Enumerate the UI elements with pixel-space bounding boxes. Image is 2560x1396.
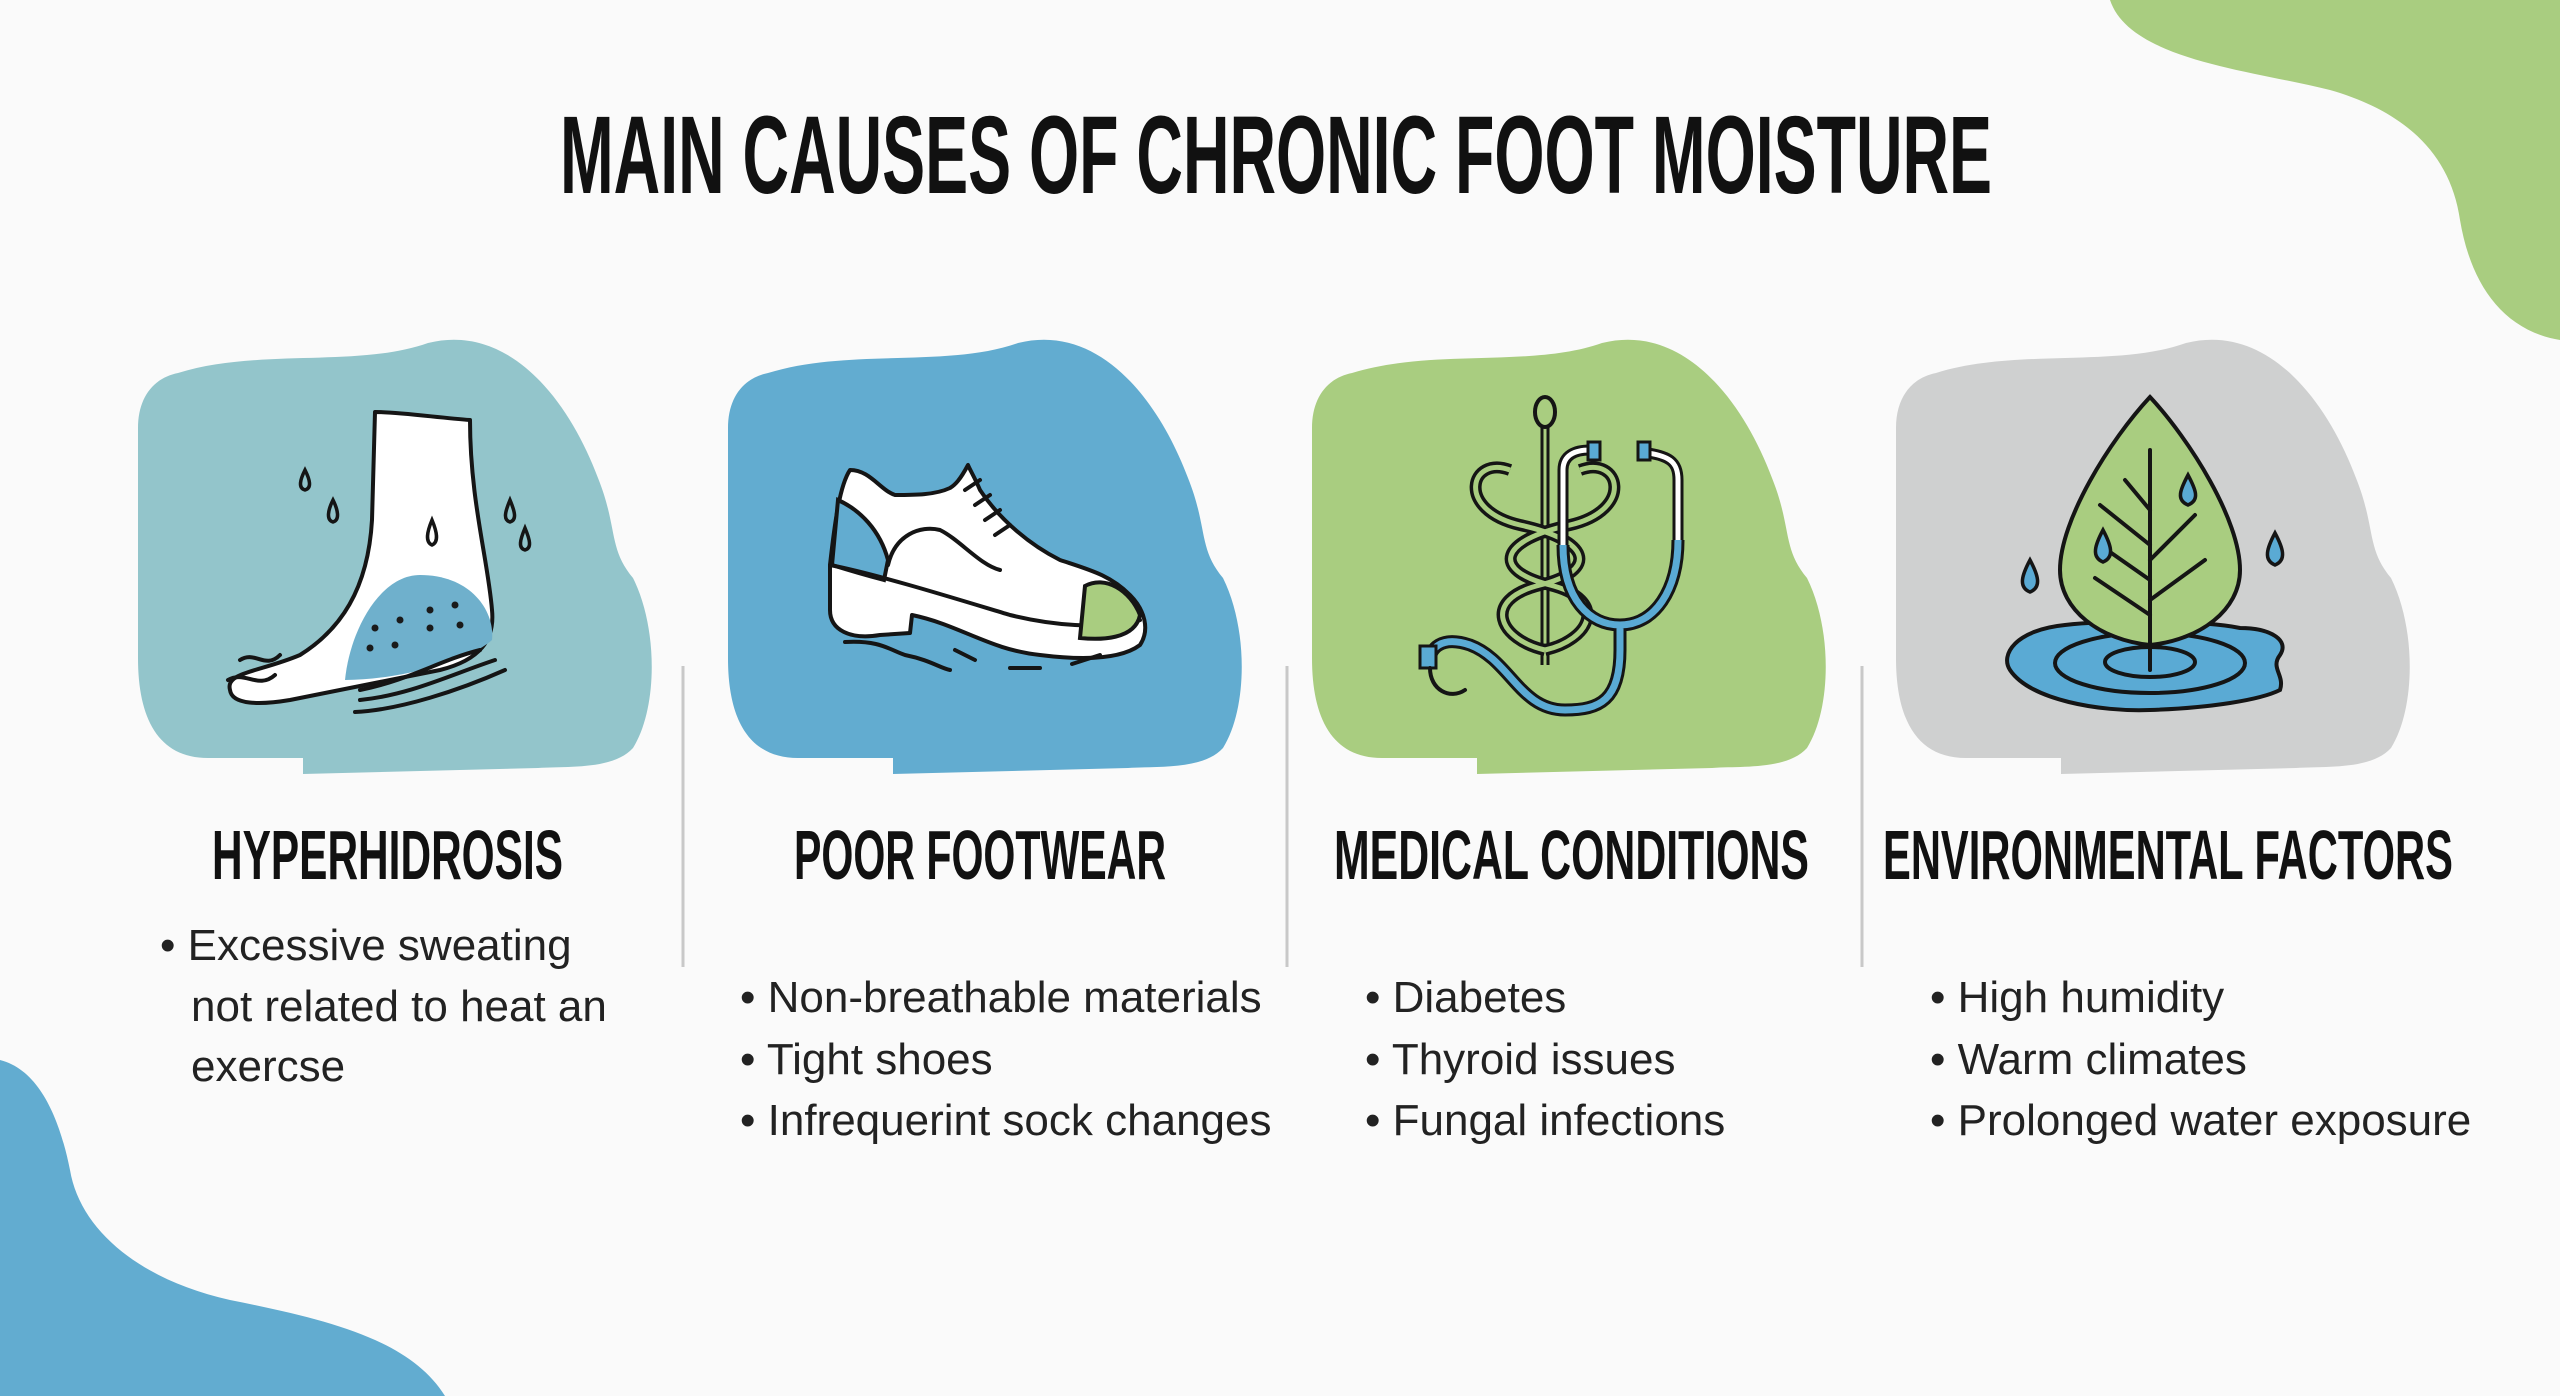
bullets: poor footwear: [740, 973, 1271, 1145]
bullets: hyperhidrosis: [160, 921, 607, 1091]
bullets: hyperhidrosis: exercse: [191, 1042, 345, 1091]
panel: hyperhidrosis: [138, 340, 652, 1091]
bullets: poor footwear: • Infrequerint sock changes: [740, 1096, 1271, 1145]
icon: shoe in water: [830, 465, 1145, 670]
bullets: medical conditions: • Fungal infections: [1365, 1096, 1725, 1145]
bullets: environmental factors: • High humidity: [1930, 973, 2224, 1022]
icon: leaf with water: [2007, 397, 2283, 710]
bullets: medical conditions: • Diabetes: [1365, 973, 1566, 1022]
decorative blob: top right: [2110, 0, 2560, 340]
bullets: hyperhidrosis: • Excessive sweating: [160, 921, 572, 970]
bullets: medical conditions: [1365, 973, 1725, 1145]
heading: medical conditions: MEDICAL CONDITIONS: [1334, 816, 1809, 894]
decorative blob: bottom left: [0, 1060, 445, 1396]
bullets: environmental factors: [1930, 973, 2471, 1145]
blob background 4: [1896, 340, 2410, 774]
blob background 2: [728, 340, 1242, 774]
panel: poor footwear: [728, 340, 1271, 1145]
bullets: medical conditions: • Thyroid issues: [1365, 1035, 1676, 1084]
bullets: environmental factors: • Warm climates: [1930, 1035, 2247, 1084]
bullets: poor footwear: • Non-breathable materials: [740, 973, 1262, 1022]
blob background 3: [1312, 340, 1826, 774]
heading: hyperhidrosis: HYPERHIDROSIS: [212, 816, 563, 894]
icon: caduceus and stethoscope: [1420, 397, 1678, 710]
bullets: hyperhidrosis: not related to heat an: [191, 982, 607, 1031]
panel: environmental factors: [1883, 340, 2471, 1145]
panel: medical conditions: [1312, 340, 1826, 1145]
bullets: environmental factors: • Prolonged water exposure: [1930, 1096, 2471, 1145]
bullets: poor footwear: • Tight shoes: [740, 1035, 993, 1084]
heading: poor footwear: POOR FOOTWEAR: [794, 816, 1166, 894]
icon: sweaty foot: [228, 412, 530, 712]
blob background 1: [138, 340, 652, 774]
